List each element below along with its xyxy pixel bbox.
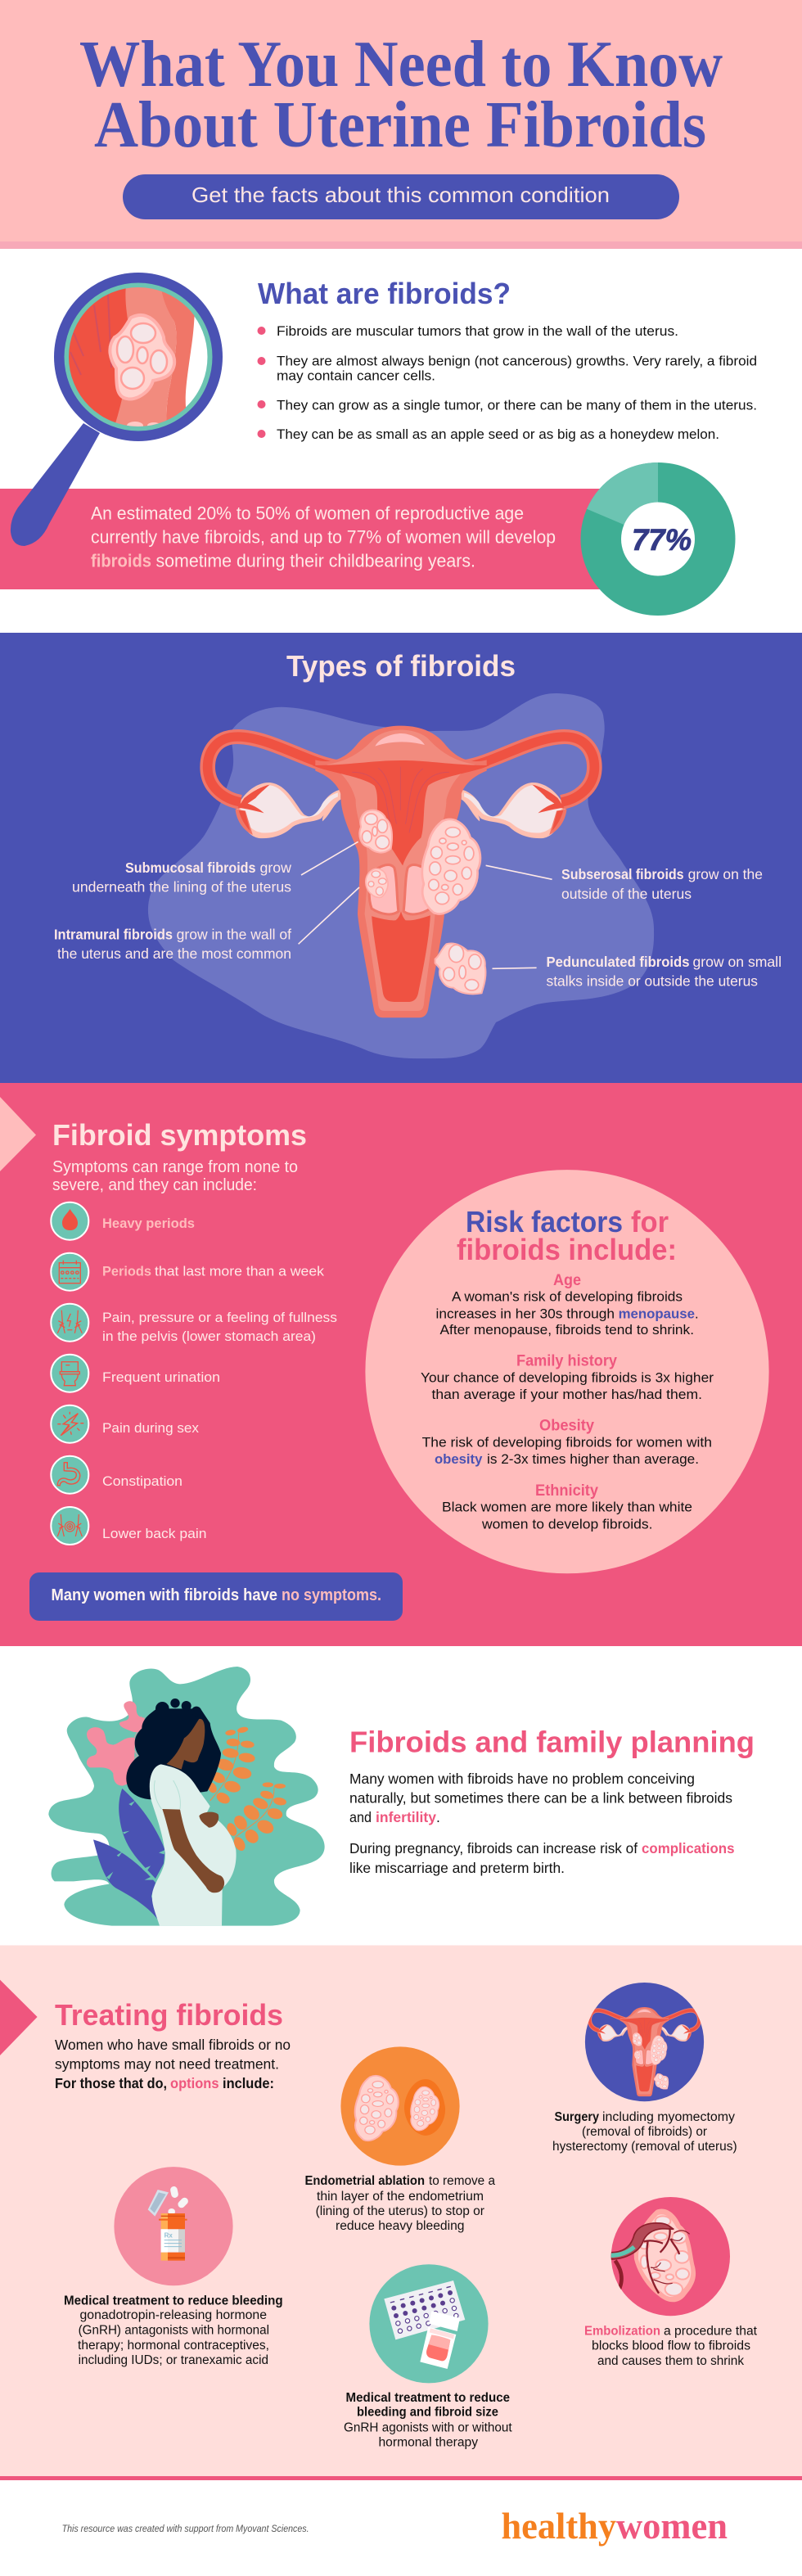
- text: medical treatment to reduce bleeding: (GnRH) antagonists with hormonal: [79, 2324, 269, 2338]
- risk: obesity: Obesity: [539, 1418, 594, 1435]
- text: treatment intro: symptoms may not need treatment.: [55, 2056, 279, 2073]
- chart: 77% donut: [581, 462, 735, 616]
- symptoms intro: [52, 1158, 298, 1194]
- text: medical treatment to reduce bleeding: including IUDs; or tranexamic acid: [79, 2353, 268, 2367]
- label: submucosal: Submucosal fibroids: [125, 859, 256, 876]
- text: embolization: Embolization: [584, 2325, 660, 2339]
- text: family planning: complications: [642, 1840, 735, 1856]
- label: subserosal: grow on the: [688, 866, 763, 882]
- text: endometrial ablation: (lining of the uterus) to stop or: [316, 2204, 484, 2218]
- symptom: pelvic pain: Pain, pressure or a feeling of fullness: [102, 1310, 337, 1325]
- panel: fibroid symptoms and risk factors: [0, 1083, 802, 1646]
- callout lines: [299, 841, 552, 968]
- risk: ethnicity: Ethnicity: [535, 1482, 598, 1500]
- label: submucosal: [72, 859, 291, 896]
- risk: obesity: obesity: [435, 1452, 483, 1467]
- text: embolization: and causes them to shrink: [597, 2354, 744, 2368]
- text: medical treatment to reduce bleeding: [64, 2294, 283, 2367]
- heading: treating fibroids: Treating fibroids: [55, 1998, 283, 2032]
- text: endometrial ablation: reduce heavy bleeding: [336, 2219, 465, 2233]
- footer credit: This resource was created with support from Myovant Sciences.: [62, 2523, 309, 2534]
- text: surgery: (removal of fibroids) or: [582, 2125, 707, 2139]
- section arrow: [0, 1980, 38, 2055]
- icon: lightning: [51, 1405, 88, 1443]
- text: family planning: and: [349, 1809, 372, 1825]
- risk: age: increases in her 30s through: [435, 1307, 615, 1322]
- label: pedunculated: [547, 954, 782, 989]
- risk: family history: [421, 1352, 714, 1402]
- risk: ethnicity: women to develop fibroids.: [481, 1518, 653, 1532]
- text: medical treatment to reduce bleeding: gonadotropin-releasing hormone: [80, 2308, 267, 2322]
- icon: blister pack and bottle: [369, 2264, 489, 2383]
- text: family planning: [349, 1771, 735, 1876]
- icon: pills and bottle: [114, 2167, 233, 2285]
- pink statistic band: fibroids: [91, 550, 151, 571]
- title: What You Need to Know: [79, 29, 723, 101]
- icon: magnifying glass over a fibroid: [11, 273, 223, 546]
- text: surgery: [552, 2110, 737, 2154]
- text: embolization: [584, 2325, 758, 2368]
- icon: pills and bottle: Rx: [164, 2231, 173, 2239]
- risk: obesity: The risk of developing fibroids for women with: [422, 1436, 712, 1450]
- text: embolization: a procedure that: [664, 2325, 758, 2339]
- text: medical treatment to reduce bleeding and fibroid size: [344, 2391, 512, 2449]
- text: medical treatment to reduce bleeding: Medical treatment to reduce bleeding: [64, 2294, 283, 2308]
- text: medical treatment to reduce bleeding and fibroid size: GnRH agonists with or without: [344, 2421, 512, 2435]
- text: medical treatment to reduce bleeding and fibroid size: hormonal therapy: [378, 2435, 478, 2449]
- label: pedunculated: grow on small: [692, 954, 782, 970]
- label: intramural: the uterus and are the most common: [57, 945, 291, 962]
- text: endometrial ablation: to remove a: [429, 2174, 495, 2188]
- text: surgery: Surgery: [555, 2110, 599, 2124]
- symptoms intro: severe, and they can include:: [52, 1176, 257, 1194]
- text: medical treatment to reduce bleeding and fibroid size: Medical treatment to reduce: [345, 2391, 510, 2405]
- heading: what are fibroids: What are fibroids?: [258, 277, 511, 310]
- symptom: long periods: that last more than a week: [155, 1264, 325, 1279]
- text: medical treatment to reduce bleeding and fibroid size: bleeding and fibroid size: [357, 2406, 498, 2420]
- icon: endometrial ablation: [340, 2046, 460, 2166]
- subtitle pill: Get the facts about this common condition: [191, 183, 610, 207]
- callout: no symptoms: Many women with fibroids have: [51, 1586, 277, 1604]
- icon: calendar: [51, 1253, 88, 1291]
- risk: age: Age: [553, 1272, 581, 1289]
- bullet list: what are fibroids: may contain cancer cells.: [277, 368, 435, 383]
- symptom: pelvic pain: [102, 1310, 337, 1344]
- background blob: [148, 693, 654, 1058]
- risk: age: .: [695, 1307, 699, 1322]
- logo: healthywomen: [501, 2505, 728, 2547]
- icon: blood drop: [51, 1202, 88, 1240]
- pink statistic band: sometime during their childbearing years.: [155, 550, 475, 571]
- text: surgery: hysterectomy (removal of uterus): [552, 2140, 737, 2154]
- symptom: pain during sex: Pain during sex: [102, 1420, 199, 1436]
- heading: fibroid symptoms: Fibroid symptoms: [52, 1118, 307, 1152]
- text: surgery: including myomectomy: [602, 2110, 735, 2124]
- icon: embolization: [611, 2197, 730, 2316]
- risk: family history: Your chance of developing fibroids is 3x higher: [421, 1370, 714, 1385]
- text: family planning: naturally, but sometimes there can be a link between fibroids: [349, 1790, 732, 1807]
- icon: toilet: [51, 1355, 88, 1392]
- symptom: pelvic pain: in the pelvis (lower stomach area): [102, 1329, 316, 1344]
- label: pedunculated: stalks inside or outside the uterus: [547, 972, 758, 989]
- heading: risk factors: fibroids include:: [457, 1233, 677, 1266]
- pink statistic band: currently have fibroids, and up to 77% of women will develop: [91, 527, 556, 547]
- bullet list: what are fibroids: They can grow as a single tumor, or there can be many of them in the uterus.: [277, 398, 757, 413]
- risk: age: menopause: [619, 1307, 695, 1322]
- header panel: [0, 0, 802, 249]
- symptom: frequent urination: Frequent urination: [102, 1369, 220, 1385]
- text: treatment intro: include:: [223, 2075, 274, 2091]
- text: family planning: During pregnancy, fibroids can increase risk of: [349, 1840, 638, 1856]
- heading: family planning: Fibroids and family planning: [349, 1726, 755, 1759]
- text: medical treatment to reduce bleeding: therapy; hormonal contraceptives,: [78, 2339, 269, 2353]
- risk: obesity: is 2-3x times higher than average.: [487, 1452, 699, 1467]
- heading: risk factors: Risk factors: [466, 1205, 623, 1238]
- logo: healthywomen: healthy: [501, 2505, 616, 2547]
- text: treatment intro: Women who have small fibroids or no: [55, 2037, 291, 2053]
- text: treatment intro: [55, 2037, 291, 2091]
- text: endometrial ablation: [304, 2174, 495, 2233]
- icon: pelvic pain: [51, 1304, 88, 1342]
- label: subserosal: outside of the uterus: [561, 886, 692, 902]
- label: intramural: grow in the wall of: [177, 927, 291, 943]
- symptom: constipation: Constipation: [102, 1473, 182, 1489]
- risk: ethnicity: [442, 1482, 692, 1532]
- symptom: lower back pain: Lower back pain: [102, 1526, 206, 1541]
- label: intramural: [54, 927, 291, 962]
- title: [79, 29, 723, 161]
- symptom: heavy periods: Heavy periods: [102, 1216, 195, 1231]
- risk: family history: Family history: [516, 1352, 617, 1370]
- panel: types of fibroids: [0, 633, 802, 1083]
- bullet list: what are fibroids: Fibroids are muscular tumors that grow in the wall of the uterus.: [277, 323, 678, 339]
- heading: types of fibroids: Types of fibroids: [286, 649, 516, 683]
- bullet list: what are fibroids: They can be as small as an apple seed or as big as a honeydew melon.: [277, 426, 719, 442]
- panel: treating fibroids: [0, 1945, 802, 2480]
- icon: surgery uterus: [585, 1983, 704, 2101]
- subtitle pill: [123, 174, 679, 219]
- risk: age: After menopause, fibroids tend to shrink.: [440, 1323, 694, 1338]
- risk: ethnicity: Black women are more likely than white: [442, 1500, 692, 1515]
- illustration: pregnant woman: [48, 1667, 325, 1926]
- text: endometrial ablation: thin layer of the endometrium: [317, 2190, 484, 2204]
- label: submucosal: grow: [260, 859, 291, 876]
- text: family planning: .: [436, 1809, 440, 1825]
- text: embolization: blocks blood flow to fibroids: [592, 2339, 750, 2353]
- title: About Uterine Fibroids: [94, 89, 706, 161]
- text: family planning: like miscarriage and preterm birth.: [349, 1860, 565, 1876]
- risk: age: [435, 1272, 699, 1338]
- pink statistic band: An estimated 20% to 50% of women of reproductive age: [91, 503, 524, 524]
- pink statistic band: [0, 489, 606, 589]
- panel: risk factors circle: [365, 1170, 769, 1573]
- risk: obesity: [422, 1418, 712, 1467]
- logo: healthywomen: women: [616, 2505, 728, 2547]
- callout: no symptoms: no symptoms.: [282, 1586, 381, 1604]
- text: family planning: Many women with fibroids have no problem conceiving: [349, 1771, 695, 1787]
- label: subserosal: [561, 866, 763, 902]
- symptoms intro: Symptoms can range from none to: [52, 1158, 298, 1176]
- icon: lower back pain: [51, 1507, 88, 1545]
- risk: family history: than average if your mother has/had them.: [432, 1387, 702, 1402]
- text: treatment intro: options: [170, 2075, 219, 2091]
- text: endometrial ablation: Endometrial ablation: [304, 2174, 425, 2188]
- bullet list: what are fibroids: [257, 323, 757, 442]
- symptom: long periods: Periods: [102, 1264, 151, 1279]
- heading: risk factors: for: [631, 1205, 669, 1238]
- label: subserosal: Subserosal fibroids: [561, 866, 684, 882]
- text: treatment intro: For those that do,: [55, 2075, 167, 2091]
- label: intramural: Intramural fibroids: [54, 927, 173, 943]
- icon: stomach: [51, 1456, 88, 1494]
- text: family planning: infertility: [376, 1809, 436, 1825]
- bullet list: what are fibroids: They are almost always benign (not cancerous) growths. Very rarely, a fibroid: [277, 354, 757, 368]
- illustration: uterus with fibroids: [208, 726, 594, 1017]
- heading: risk factors: [457, 1205, 677, 1266]
- label: pedunculated: Pedunculated fibroids: [547, 954, 690, 970]
- chart: 77% donut: 77%: [632, 523, 692, 557]
- section arrow: [0, 1097, 36, 1171]
- label: submucosal: underneath the lining of the uterus: [72, 879, 291, 896]
- callout: no symptoms: [29, 1572, 403, 1621]
- risk: age: A woman's risk of developing fibroids: [452, 1290, 683, 1305]
